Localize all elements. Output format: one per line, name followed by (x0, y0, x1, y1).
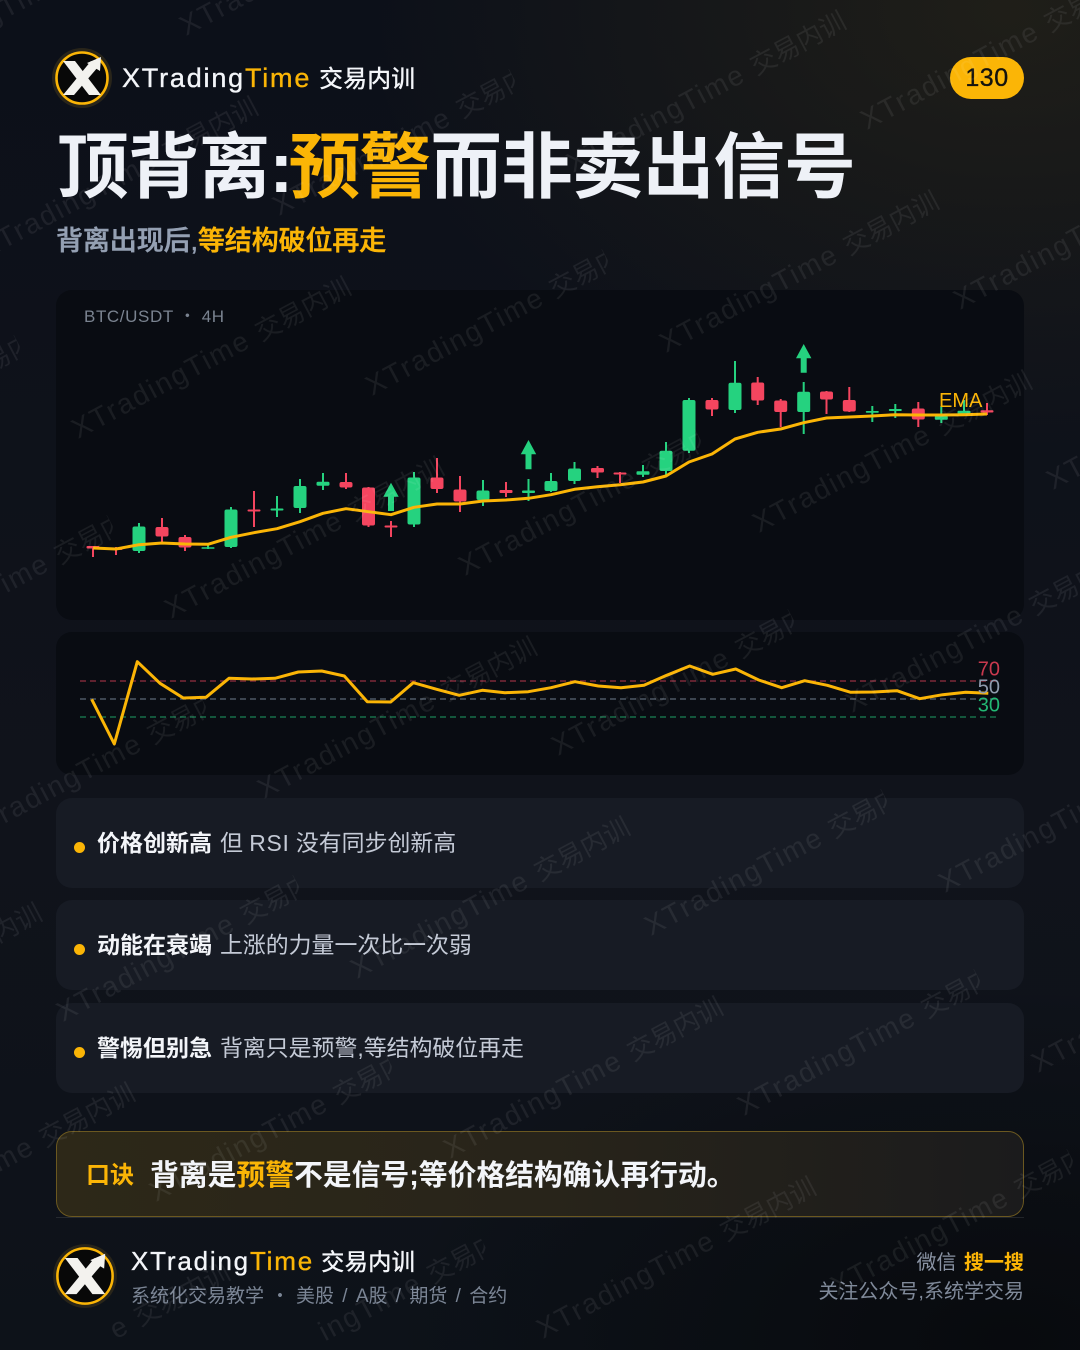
footer divider (56, 1217, 1024, 1218)
watermark pattern: XTradingTime 交易内训 (345, 811, 635, 984)
watermark pattern: XTradingTime 交易内训 (453, 408, 743, 581)
footer logo (53, 1244, 117, 1308)
issue number badge (950, 57, 1024, 99)
RSI labels: 30 (978, 694, 1000, 716)
subtitle: 背离出现后,等结构破位再走 (56, 226, 386, 256)
RSI line (92, 662, 988, 744)
RSI labels (978, 658, 1000, 716)
footer tagline: ・ (270, 1286, 290, 1307)
EMA label: EMA (939, 390, 983, 412)
chart label: BTC/USDT ・ 4H (84, 307, 225, 326)
text: 警惕但别急 背离只是预警,等结构破位再走 (97, 1035, 524, 1061)
footer brand name: XTradingTime 交易内训 (131, 1246, 415, 1276)
bullet (74, 1047, 85, 1058)
watermark pattern: XTradingTime 交易内训 (51, 854, 341, 1027)
watermark pattern: XTradingTime 交易内训 (159, 451, 449, 624)
arrow: signal 1 (383, 483, 399, 511)
watermark pattern: XTradingTime 交易内训 (252, 631, 542, 804)
text: 动能在衰竭 上涨的力量一次比一次弱 (97, 932, 472, 958)
callout label: 口诀 (86, 1162, 134, 1189)
watermark pattern: XTradingTime 交易内训 (546, 588, 836, 761)
watermark pattern: XTradingTime 交易内训 (654, 185, 944, 358)
RSI labels: 70 (978, 658, 1000, 680)
watermark pattern: XTradingTime 交易内训 (747, 365, 1037, 538)
watermark pattern: XTradingTime 交易内训 (531, 1171, 821, 1344)
bullet (74, 842, 85, 853)
footer wechat prompt: 微信 搜一搜 (916, 1252, 1024, 1274)
watermark pattern: XTradingTime 交易内训 (732, 948, 1022, 1121)
watermark pattern: e 交易内训 (104, 1256, 235, 1345)
watermark pattern: ingTime 交易内训 (313, 1213, 528, 1347)
watermark pattern: XTradingTime 交易内训 (438, 991, 728, 1164)
candlestick chart (86, 344, 994, 557)
watermark pattern: XTradingTime 交易内训 (639, 768, 929, 941)
bullet (74, 944, 85, 955)
card: point 1 (56, 798, 1024, 888)
red candles (86, 377, 994, 557)
text: 价格创新高 但 RSI 没有同步创新高 (97, 830, 456, 856)
watermark pattern: XTradingTime 交易内训 (360, 228, 650, 401)
header logo (52, 48, 112, 108)
panel: RSI chart (56, 632, 1024, 775)
footer tagline: 系统化交易教学 美股 / A股 / 期货 / 合约 (131, 1286, 507, 1307)
card: point 3 (56, 1003, 1024, 1093)
RSI labels: 50 (978, 676, 1000, 698)
watermark pattern: XTradingTime 交易内训 (267, 48, 557, 221)
RSI level lines (80, 681, 998, 717)
watermark pattern: XTradingTime 交易内训 (144, 1034, 434, 1207)
watermark pattern: XTradingTime 交易内训 (66, 271, 356, 444)
panel: price chart (56, 290, 1024, 620)
brand name: XTradingTime 交易内训 (122, 63, 415, 93)
callout: mantra (56, 1131, 1024, 1217)
watermark pattern: XTradingTime 交易内训 (561, 5, 851, 178)
EMA line (93, 414, 987, 549)
callout text: 背离是预警不是信号;等价格结构确认再行动。 (150, 1160, 736, 1192)
card: point 2 (56, 900, 1024, 990)
arrow: signal 3 (796, 344, 811, 373)
green candles (132, 361, 970, 553)
title: 顶背离:预警而非卖出信号 (57, 128, 855, 208)
footer follow text: 关注公众号,系统学交易 (818, 1281, 1024, 1303)
issue number badge: 130 (965, 64, 1009, 92)
arrow: signal 2 (521, 440, 536, 469)
